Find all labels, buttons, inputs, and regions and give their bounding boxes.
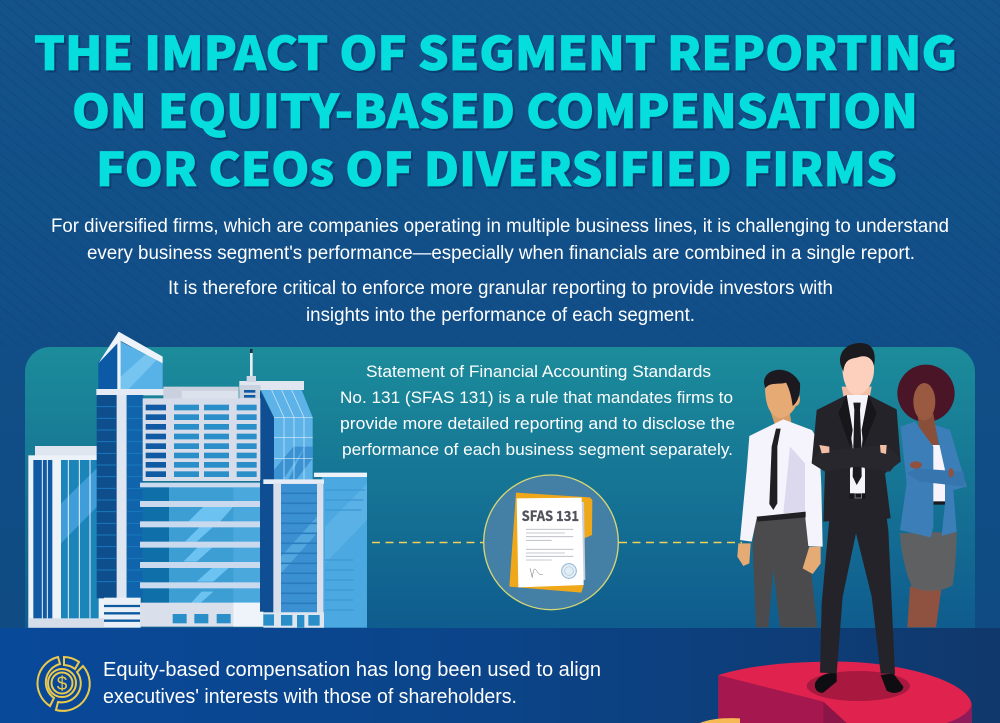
- man in black suit: [812, 343, 903, 693]
- connector: dashed line: [372, 542, 742, 544]
- panel text: SFAS 131 definition: [340, 362, 735, 459]
- intro text: It is therefore critical to enforce more granular reporting to provide investors with: [168, 278, 833, 299]
- intro text: insights into the performance of each segment.: [306, 305, 695, 326]
- right glass tower: [239, 349, 313, 480]
- bottom text: executives' interests with those of shareholders.: [103, 686, 517, 708]
- man in white shirt: [737, 370, 823, 627]
- icon: SFAS 131 document: [484, 475, 618, 610]
- platform: [700, 662, 972, 723]
- left building: [28, 446, 104, 628]
- right lower block: [260, 479, 324, 628]
- panel text: SFAS 131 definition: provide more detailed reporting and to disclose the: [340, 414, 735, 433]
- bottom band: [0, 628, 1000, 723]
- far right tower: [314, 473, 367, 628]
- title: ON EQUITY-BASED COMPENSATION: [72, 76, 918, 142]
- intro text: For diversified firms, which are companies operating in multiple business lines, it is challenging to understand: [51, 216, 949, 237]
- title: FOR CEOs OF DIVERSIFIED FIRMS: [96, 134, 897, 200]
- panel: SFAS 131 background: [25, 347, 975, 628]
- panel text: SFAS 131 definition: No. 131 (SFAS 131) is a rule that mandates firms to: [340, 388, 733, 407]
- panel text: SFAS 131 definition: performance of each business segment separately.: [342, 440, 733, 459]
- bottom text: Equity-based compensation has long been used to align: [103, 659, 601, 681]
- bottom text: [103, 659, 601, 708]
- tall glass tower: [96, 332, 167, 628]
- woman: [897, 365, 967, 627]
- illustration: city buildings: [28, 332, 367, 628]
- illustration: three executives on platform: [700, 343, 972, 723]
- icon: equity dollar pie: $: [57, 674, 68, 695]
- title: [34, 18, 957, 200]
- intro text: [51, 216, 949, 326]
- paper: SFAS 131: [522, 506, 579, 526]
- icon: equity dollar pie: [37, 657, 90, 711]
- background: [0, 0, 1000, 347]
- panel text: SFAS 131 definition: Statement of Financial Accounting Standards: [366, 362, 711, 381]
- folder: [509, 493, 592, 593]
- intro text: every business segment's performance—especially when financials are combined in a single report.: [87, 243, 915, 264]
- title: THE IMPACT OF SEGMENT REPORTING: [34, 18, 957, 84]
- center office block: [140, 387, 263, 627]
